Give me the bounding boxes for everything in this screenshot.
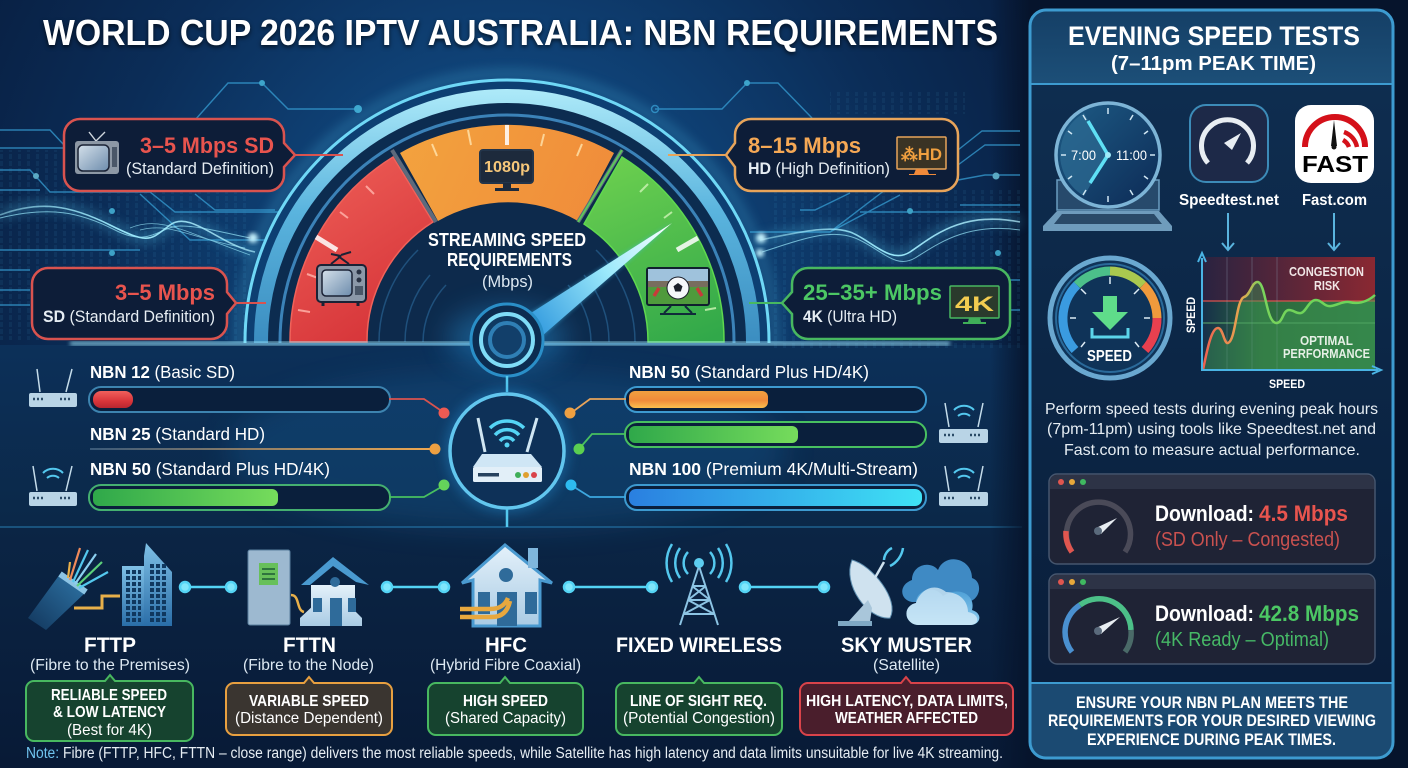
result card: 42.8 Mbps: (4K Ready – Optimal) [1155, 629, 1329, 651]
result card: 4.5 Mbps: 4.5 Mbps [1259, 501, 1348, 526]
plan: NBN 50 right [564, 362, 926, 418]
speed test instructions: Fast.com to measure actual performance. [1064, 442, 1360, 459]
connection: FTTP: (Best for 4K) [67, 722, 152, 739]
connector lines [180, 582, 829, 592]
icon: node cabinet and house [248, 550, 369, 626]
gauge hub [471, 304, 543, 392]
callout: 8-15 Mbps HD [668, 119, 958, 191]
callout: 25-35+ Mbps 4K: 25–35+ Mbps [803, 280, 942, 305]
chart: congestion vs optimal performance [1184, 253, 1381, 391]
chart: congestion vs optimal performance: RISK [1314, 278, 1341, 293]
icon: 4K monitor: 4K [955, 293, 994, 316]
gauge scale ticks [298, 125, 716, 312]
gauge centre label: (Mbps) [482, 272, 533, 291]
connection: Sky Muster [800, 634, 1013, 735]
icon: small router NBN 12 [29, 369, 77, 407]
connection: HFC [428, 634, 583, 735]
connection: Fixed Wireless: FIXED WIRELESS [616, 634, 782, 657]
plan: NBN 50 left: NBN 50 (Standard Plus HD/4K) [90, 459, 330, 479]
speed test instructions: Perform speed tests during evening peak hours [1045, 401, 1378, 418]
connection: HFC: (Hybrid Fibre Coaxial) [430, 657, 581, 674]
icon: laptop with clock: 7:00 [1071, 148, 1096, 163]
callout: 8-15 Mbps HD: HD (High Definition) [748, 159, 890, 178]
callout: 3-5 Mbps SD lower: SD (Standard Definition) [43, 307, 215, 326]
connection: FTTP [26, 634, 193, 741]
panel footer: ENSURE YOUR NBN PLAN MEETS THE [1076, 693, 1348, 712]
gauge centre label [428, 230, 586, 291]
panel footer: EXPERIENCE DURING PEAK TIMES. [1087, 730, 1336, 749]
connection: FTTP: (Fibre to the Premises) [30, 657, 190, 674]
gauge centre label: STREAMING SPEED [428, 230, 586, 250]
NBN plan bars left [89, 362, 450, 510]
connection: FTTN: (Fibre to the Node) [243, 657, 374, 674]
result card: 42.8 Mbps [1049, 574, 1375, 664]
arrow: Speedtest to chart [1222, 213, 1234, 250]
plan: NBN 50 left [89, 459, 450, 510]
icon: speed download gauge [1050, 258, 1170, 378]
plan: NBN 50 right: NBN 50 (Standard Plus HD/4K) [629, 362, 869, 382]
icon: 1080p monitor: 1080p [484, 159, 530, 176]
connection: FTTN: VARIABLE SPEED [249, 693, 369, 710]
icon: Speedtest tile [1190, 105, 1268, 182]
callout: 8-15 Mbps HD: 8–15 Mbps [748, 133, 861, 158]
icon: Fast tile: FAST [1302, 151, 1368, 177]
icon: retro TV [75, 132, 119, 174]
connection: FTTN [226, 634, 392, 735]
speed test instructions [1045, 401, 1378, 459]
gauge segment: orange HD [400, 125, 614, 221]
result card: 42.8 Mbps: 42.8 Mbps [1259, 601, 1359, 626]
connection: HFC: (Shared Capacity) [445, 710, 566, 727]
callout: 3-5 Mbps SD top: 3–5 Mbps SD [140, 133, 274, 158]
connection type icons row [28, 543, 979, 630]
icon: fibre cable and buildings [28, 543, 172, 630]
icon: laptop with clock: 11:00 [1116, 148, 1147, 163]
tool labels: Speedtest.net [1179, 192, 1280, 209]
NBN plan bars right [564, 362, 926, 510]
connection: FTTN: FTTN [283, 634, 336, 657]
plan: unlabelled green bar [574, 422, 926, 454]
gauge needle [520, 223, 672, 336]
connection: Sky Muster: SKY MUSTER [841, 634, 972, 657]
tool labels [1179, 192, 1367, 209]
icon: small router with wifi lower right [939, 466, 988, 506]
panel heading: EVENING SPEED TESTS [1068, 21, 1360, 51]
chart: congestion vs optimal performance: PERFORMANCE [1283, 346, 1370, 361]
gauge inner arcs [379, 250, 635, 342]
icon: wireless tower [667, 544, 731, 625]
result card: 4.5 Mbps [1049, 474, 1375, 564]
speed test instructions: (7pm-11pm) using tools like Speedtest.net and [1047, 421, 1376, 438]
tool labels: Fast.com [1302, 192, 1367, 209]
icon: HD monitor: ⁂HD [900, 145, 942, 164]
connection: Sky Muster: WEATHER AFFECTED [835, 710, 978, 727]
circuit traces and data matrix background [0, 80, 1020, 350]
connection: HFC: HIGH SPEED [463, 693, 548, 710]
icon: Fast tile [1295, 105, 1374, 183]
chart: congestion vs optimal performance: CONGESTION [1289, 264, 1364, 279]
plan: NBN 100 [566, 459, 926, 510]
connection: Fixed Wireless: LINE OF SIGHT REQ. [630, 693, 767, 710]
arrow: Fast to chart [1328, 213, 1340, 250]
connection: Fixed Wireless [616, 634, 782, 735]
plan: NBN 25 [90, 424, 440, 454]
panel: evening speed tests [1030, 10, 1393, 758]
icon: small router with wifi lower left [29, 466, 77, 506]
callout: 3-5 Mbps SD top: (Standard Definition) [126, 159, 274, 178]
central router hub [445, 389, 569, 527]
panel heading: (7–11pm PEAK TIME) [1111, 53, 1316, 75]
icon: 1080p monitor [480, 150, 533, 191]
gauge segment: red SD [290, 157, 433, 342]
connection: FTTP: & LOW LATENCY [53, 704, 167, 721]
data waves [0, 206, 1020, 261]
result card: 4.5 Mbps: Download: [1155, 501, 1254, 526]
callout: 3-5 Mbps SD lower: 3–5 Mbps [115, 280, 215, 305]
callout: 3-5 Mbps SD top [64, 119, 343, 191]
connection: Fixed Wireless: (Potential Congestion) [623, 710, 775, 727]
chart: congestion vs optimal performance: SPEED [1269, 377, 1305, 391]
icon: gauge TV [317, 252, 366, 306]
gauge segment: green 4K [584, 157, 724, 342]
plan: NBN 25: NBN 25 (Standard HD) [90, 424, 265, 444]
icon: speed download gauge: SPEED [1087, 348, 1132, 365]
streaming speed gauge [67, 66, 953, 392]
footnote: Note: Fibre (FTTP, HFC, FTTN – close range) delivers the most reliable speeds, while Satellite has high latency and data limits unsuitable for live 4K streaming. [26, 745, 1003, 762]
title: WORLD CUP 2026 IPTV AUSTRALIA: NBN REQUIREMENTS [43, 12, 998, 53]
gauge centre label: REQUIREMENTS [447, 250, 572, 270]
icon: HFC house [460, 545, 552, 626]
result card: 4.5 Mbps: (SD Only – Congested) [1155, 529, 1340, 551]
icon: HD monitor [897, 137, 946, 175]
chart: congestion vs optimal performance: SPEED [1184, 297, 1198, 333]
connection: Sky Muster: HIGH LATENCY, DATA LIMITS, [806, 693, 1008, 710]
plan: NBN 100: NBN 100 (Premium 4K/Multi-Stream) [629, 459, 918, 479]
icon: satellite dish and cloud [838, 548, 979, 626]
plan: NBN 12: NBN 12 (Basic SD) [90, 362, 235, 382]
icon: football match monitor [647, 268, 709, 314]
callout: 25-35+ Mbps 4K [749, 268, 1010, 339]
connection: FTTP: RELIABLE SPEED [51, 687, 167, 704]
connection: FTTN: (Distance Dependent) [235, 710, 383, 727]
connection: HFC: HFC [485, 634, 527, 657]
panel heading [1068, 21, 1360, 75]
floor line [70, 342, 950, 345]
panel footer [1030, 682, 1393, 758]
connection: FTTP: FTTP [84, 634, 136, 657]
chart: congestion vs optimal performance: OPTIMAL [1300, 333, 1353, 348]
connection: Sky Muster: (Satellite) [873, 657, 940, 674]
callout: 25-35+ Mbps 4K: 4K (Ultra HD) [803, 307, 897, 326]
callout: 3-5 Mbps SD lower [32, 268, 266, 339]
icon: small router with wifi upper right [939, 403, 988, 443]
result card: 42.8 Mbps: Download: [1155, 601, 1254, 626]
icon: 4K monitor [950, 286, 999, 324]
plan: NBN 12 [89, 362, 450, 418]
icon: laptop with clock [1043, 103, 1172, 231]
